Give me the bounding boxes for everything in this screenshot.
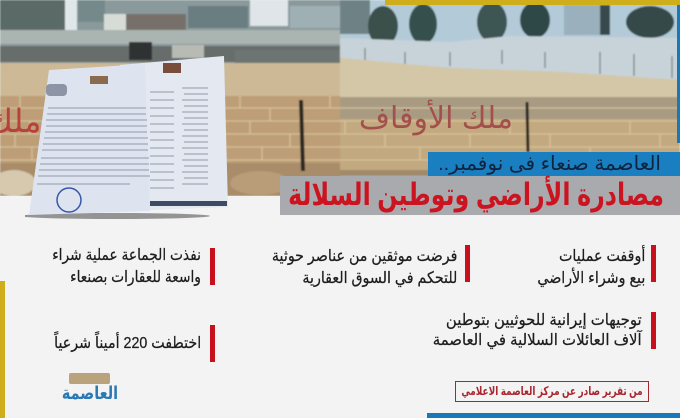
item: notaries abducted	[54, 325, 215, 362]
bottom blue bar	[427, 413, 680, 418]
logo emblem	[69, 373, 110, 384]
source text: من تقرير صادر عن مركز العاصمة الاعلامي	[461, 384, 643, 398]
item: land sale halted	[537, 244, 656, 288]
logo text: العاصمة	[62, 383, 118, 403]
text	[52, 247, 201, 286]
subtitle text: العاصمة صنعاء فى نوفمبر..	[438, 153, 661, 175]
marker	[651, 245, 656, 282]
text	[433, 312, 642, 350]
marker	[651, 312, 656, 349]
item: Houthi notaries	[272, 245, 470, 288]
source box	[455, 381, 649, 402]
text: أوقفت عمليات	[559, 248, 645, 265]
left gold strip	[0, 281, 5, 418]
marker	[210, 248, 215, 285]
text	[537, 244, 645, 288]
marker	[210, 325, 215, 362]
background photo: land and walls: ملك الأوقاف	[359, 98, 513, 136]
item: Iranian directives	[433, 312, 656, 350]
title text: مصادرة الأراضي وتوطين السلالة	[288, 177, 664, 212]
text: اختطفت 220 أميناً شرعياً	[54, 335, 201, 352]
marker	[465, 245, 470, 282]
text: واسعة للعقارات بصنعاء	[70, 268, 201, 286]
subtitle banner	[428, 152, 680, 176]
item: mass purchases	[52, 247, 215, 286]
top gold bar	[385, 0, 680, 5]
text: توجيهات إيرانية للحوثيين بتوطين	[446, 312, 642, 329]
text: للتحكم في السوق العقارية	[302, 270, 457, 286]
background photo: land and walls	[0, 0, 680, 196]
text: نفذت الجماعة عملية شراء	[52, 247, 201, 264]
text	[272, 248, 457, 288]
logo: Al-Asima	[62, 373, 118, 403]
text: بيع وشراء الأراضي	[537, 270, 645, 286]
title banner	[280, 176, 680, 215]
text: آلاف العائلات السلالية في العاصمة	[433, 332, 642, 348]
document photo: two official papers	[25, 56, 228, 219]
text: فرضت موثقين من عناصر حوثية	[272, 248, 457, 265]
right blue strip	[677, 5, 680, 143]
